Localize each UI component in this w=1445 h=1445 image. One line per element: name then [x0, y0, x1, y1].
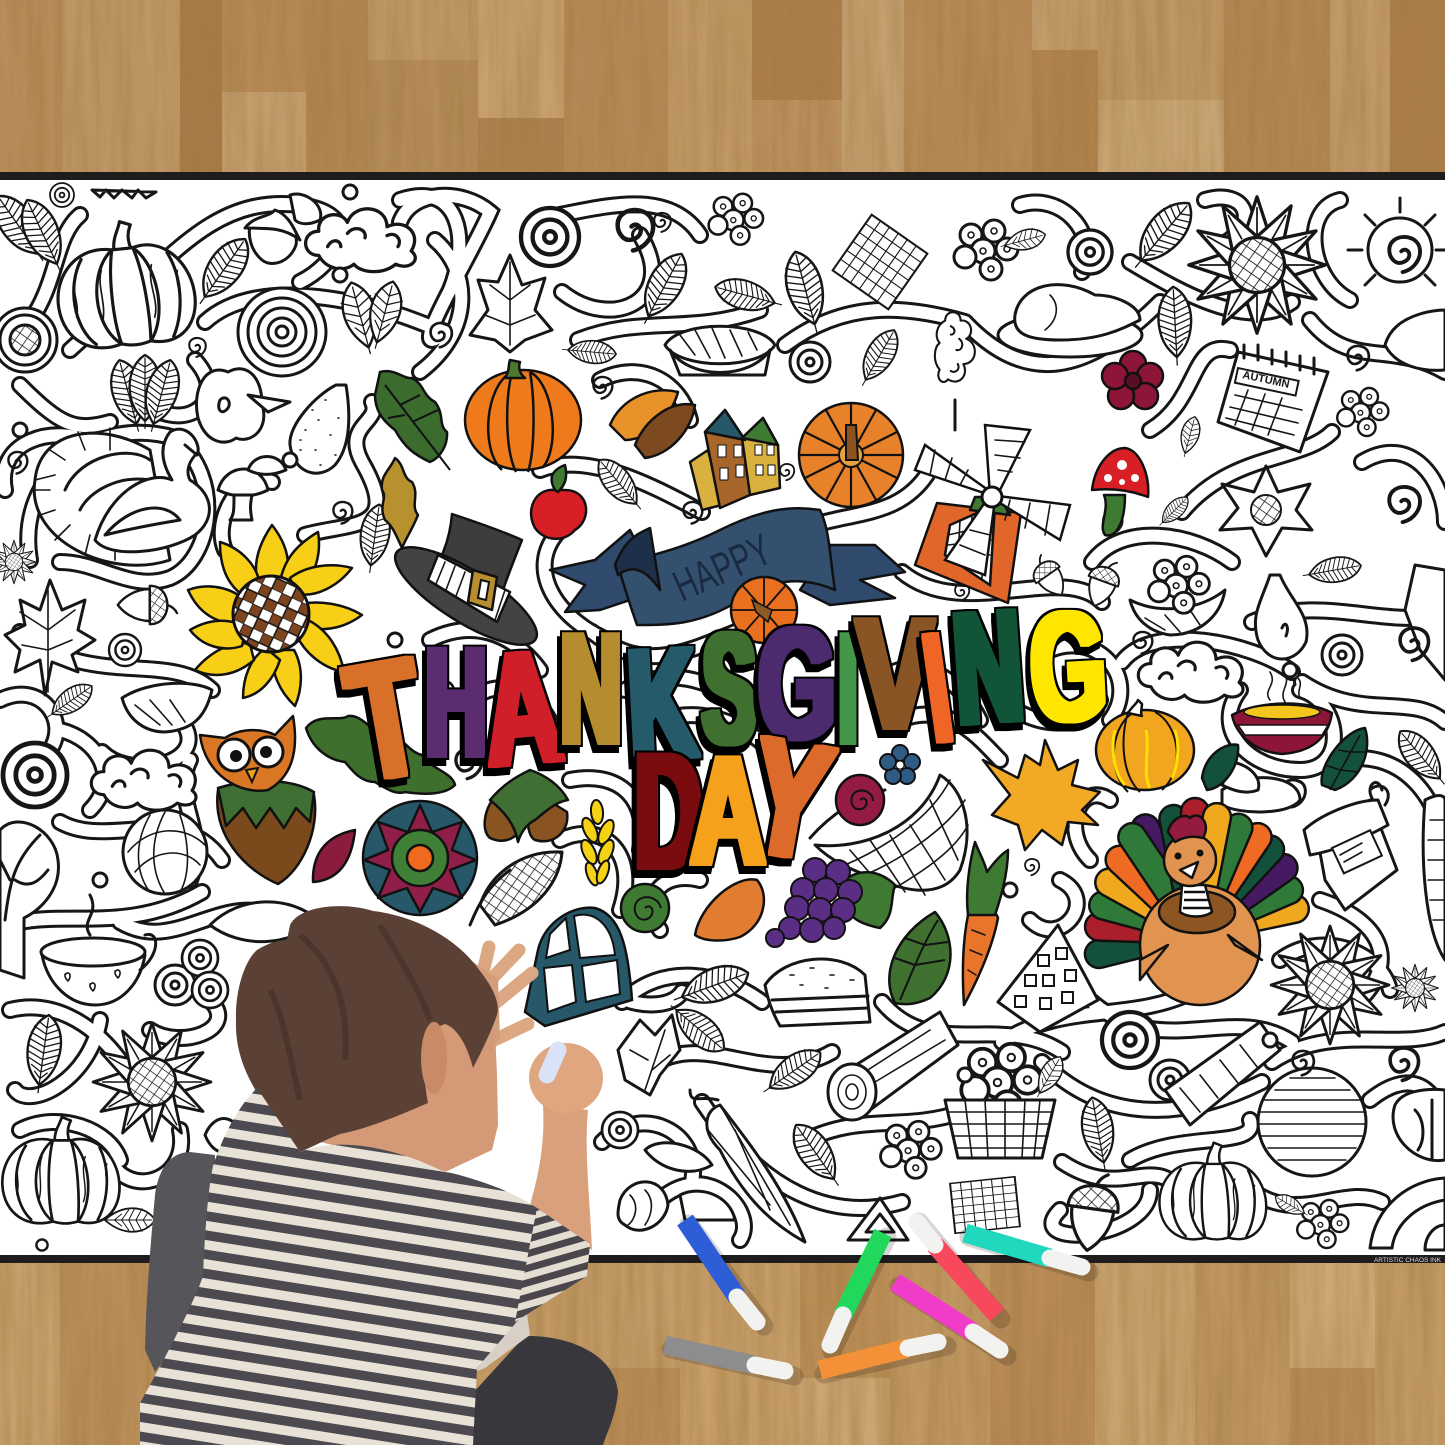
- colored: autumn leaves: [610, 390, 695, 458]
- colored: sunflower: [188, 525, 362, 706]
- small fillers: spirals and dots: [8, 185, 1297, 1082]
- outline leaves and log, lower center: [618, 958, 958, 1120]
- outline corn: [470, 852, 562, 925]
- title: THANKSGIVING: H: [425, 614, 487, 790]
- title: THANKSGIVING: N: [560, 600, 622, 777]
- title: THANKSGIVING: N: [948, 575, 1029, 758]
- outline strawberry and clouds: [245, 194, 415, 272]
- outline jar: [1304, 782, 1445, 960]
- title: THANKSGIVING: I: [916, 601, 959, 776]
- outline bottom right items: [1062, 926, 1445, 1254]
- outline turkey, left: [34, 428, 209, 565]
- marker: red: [917, 1222, 997, 1315]
- outline building: [998, 925, 1098, 1032]
- outline top right items: [851, 192, 1445, 522]
- title: THANKSGIVING: T: [336, 623, 437, 818]
- colored: gold oak leaf: [382, 458, 418, 548]
- outline top center items: [431, 194, 834, 382]
- colored: owl: [200, 716, 315, 884]
- wood floor: top: [0, 0, 1445, 175]
- colored: green leaves right: [1202, 728, 1367, 812]
- colored: orange pumpkin top: [465, 360, 581, 472]
- colored: apple: [531, 465, 586, 539]
- colored: windmill: [915, 425, 1070, 603]
- outline cornucopia: [810, 775, 968, 895]
- colored: banner HAPPY: HAPPY: [666, 524, 778, 611]
- marker: magenta: [895, 1282, 1000, 1350]
- marker: blue: [685, 1220, 757, 1322]
- colored: soup bowl: [1232, 672, 1332, 754]
- title: THANKSGIVING: S: [702, 600, 756, 777]
- colored: hazelnuts: [485, 770, 568, 842]
- marker: orange: [820, 1342, 938, 1370]
- outline fruit bowl: [1024, 550, 1225, 635]
- colored: red mushroom: [1092, 448, 1148, 535]
- arm: [530, 1105, 592, 1250]
- outline leaves and maple, top left: [0, 183, 408, 435]
- colored: oak leaf: [306, 716, 455, 794]
- belly shirt: [475, 1300, 530, 1372]
- colored: burgundy flower: [1102, 351, 1163, 409]
- outline lower left flora: [2, 1013, 240, 1251]
- colored: houses: [690, 410, 780, 510]
- sleeve: [515, 1208, 590, 1322]
- outline pumpkin, top left: [50, 215, 199, 352]
- sock and knee: [145, 1152, 215, 1372]
- colored: window: [525, 908, 632, 1026]
- colored: yellow pumpkin: [1096, 700, 1194, 792]
- title: DAY: A: [690, 724, 766, 897]
- dark pants: [473, 1336, 618, 1445]
- colored: top-view pumpkin: [799, 403, 903, 507]
- other hand fingers: [480, 947, 532, 1042]
- title: THANKSGIVING: [336, 575, 1110, 818]
- striped shirt: [140, 1088, 590, 1445]
- colored: green leaf lower: [889, 912, 951, 1004]
- outline pear and cloud: [1133, 575, 1445, 807]
- title: DAY: D: [634, 720, 702, 904]
- circle rosette, far left: [0, 308, 57, 372]
- colored: grapes: [766, 858, 895, 947]
- title: DAY: [634, 702, 844, 904]
- outline cup and spirals: [41, 895, 318, 1008]
- outline cake: [765, 959, 870, 1026]
- colored: small orange pumpkin: [731, 577, 797, 643]
- colored: carrot: [963, 842, 1008, 1005]
- hair: [236, 906, 498, 1152]
- colored: green leaf: [375, 371, 450, 470]
- outline roast turkey: [998, 285, 1142, 357]
- title: THANKSGIVING: V: [856, 587, 934, 762]
- title: DAY: Y: [736, 702, 844, 897]
- title: THANKSGIVING: G: [1026, 579, 1110, 755]
- outline maple leaf and acorn, left: [0, 540, 212, 810]
- outline tree, center: [935, 312, 975, 430]
- outline calendar: AUTUMN: [1218, 345, 1328, 452]
- marker: green: [830, 1233, 883, 1345]
- outline pie top view: [238, 288, 326, 376]
- colored: burgundy leaf: [313, 830, 355, 882]
- credit: ARTISTIC CHAOS INK: [1374, 1257, 1442, 1264]
- ear: [421, 1022, 447, 1094]
- wood floor: bottom: [0, 1258, 1445, 1445]
- doodle background bands: [0, 196, 1445, 1240]
- marker shadows: [671, 1222, 1089, 1376]
- turkey tail feathers: [1082, 798, 1311, 971]
- marker: grey: [665, 1345, 785, 1371]
- colored: orange carrot-shaped squash: [695, 879, 764, 941]
- colored: turkey: [1082, 798, 1311, 1005]
- title: THANKSGIVING: A: [477, 615, 568, 800]
- title: THANKSGIVING: K: [624, 615, 700, 794]
- outline calendar: AUTUMN: AUTUMN: [1241, 369, 1291, 391]
- marker in hand: [547, 1050, 558, 1075]
- colored: maple leaf: [983, 740, 1100, 850]
- outline star flower, right: [1154, 466, 1445, 680]
- title: THANKSGIVING: G: [758, 596, 836, 773]
- outline napkin grid: [833, 215, 927, 309]
- outline leaf ball, left: [123, 810, 207, 894]
- colored: star medallion: [363, 801, 477, 915]
- face and neck: [320, 1010, 498, 1172]
- colored: green spiral: [621, 884, 669, 932]
- outline food basket: [945, 1044, 1069, 1233]
- outline umbrella, leaf and berries: [602, 1090, 941, 1242]
- colored: wheat: [578, 800, 617, 887]
- fist: [529, 1043, 603, 1113]
- title: THANKSGIVING: I: [839, 601, 857, 777]
- colored: hat: [383, 514, 549, 662]
- outline bare tree: [0, 822, 58, 978]
- poster sheet: [0, 172, 1445, 1263]
- colored: banner HAPPY: [550, 508, 905, 625]
- outline apple, pear and mushrooms: [196, 369, 349, 520]
- colored: rose and blue flower: [836, 745, 920, 825]
- marker: teal: [965, 1233, 1082, 1267]
- boy drawing on the poster: [140, 906, 618, 1445]
